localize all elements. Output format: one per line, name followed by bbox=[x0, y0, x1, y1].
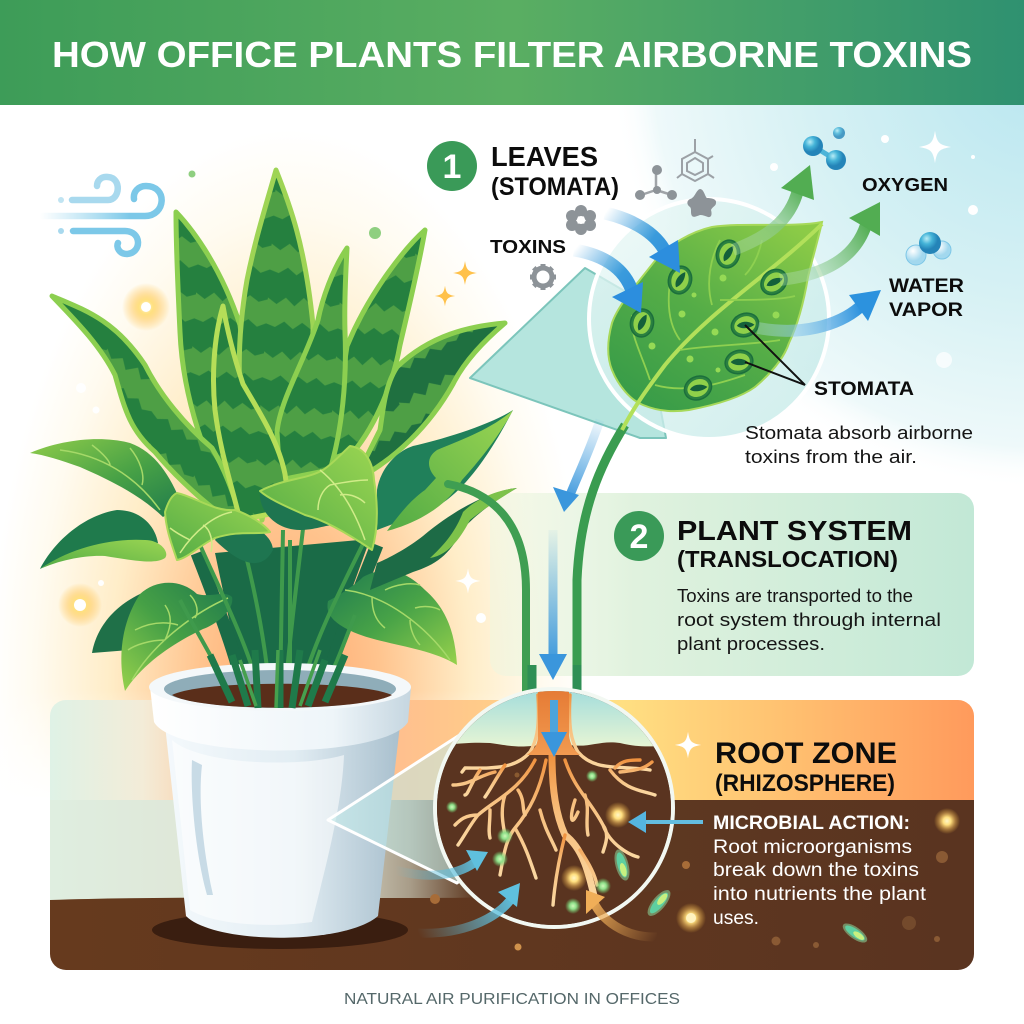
text: stomata description: Stomata absorb airborne bbox=[745, 423, 973, 443]
text: translocation description: plant processes. bbox=[677, 634, 825, 654]
text: microbial action: uses. bbox=[713, 908, 759, 929]
heading: root zone bbox=[715, 737, 897, 797]
snake leaf: right wide bbox=[355, 323, 505, 480]
text: microbial action: MICROBIAL ACTION: bbox=[713, 813, 910, 834]
heading: plant system bbox=[677, 515, 912, 572]
text: translocation description bbox=[677, 586, 941, 654]
number badge 1 bbox=[427, 141, 477, 191]
footer caption: NATURAL AIR PURIFICATION IN OFFICES bbox=[344, 991, 680, 1008]
water vapor molecule icon bbox=[906, 232, 951, 265]
label: toxins: TOXINS bbox=[490, 237, 566, 257]
heart leaf: bottom left bbox=[121, 583, 232, 691]
header banner bbox=[0, 0, 1024, 105]
snake leaf: center tall bbox=[239, 170, 313, 520]
text: microbial action: into nutrients the plant bbox=[713, 884, 927, 905]
icon: wind bbox=[42, 177, 162, 254]
plant decorative glows and sparkles bbox=[58, 170, 486, 627]
number badge 1: 1 bbox=[443, 148, 461, 186]
number badge 2: 2 bbox=[630, 518, 648, 556]
text: microbial action: break down the toxins bbox=[713, 860, 919, 881]
dark stem mass bbox=[215, 539, 370, 695]
glowing microbes and nutrients bbox=[446, 770, 632, 914]
leaf zoom circle bbox=[589, 199, 829, 439]
stem into zoom circle bbox=[532, 665, 577, 695]
curved runner stem bbox=[448, 484, 526, 695]
heart leaf: right lower bbox=[370, 488, 517, 590]
snake leaf: right narrow bbox=[277, 248, 347, 480]
number badge 2 bbox=[614, 511, 664, 561]
sparkle: root zone bbox=[675, 732, 701, 758]
pot rim bbox=[150, 687, 411, 750]
stems bbox=[180, 510, 365, 695]
text: translocation description: root system through internal bbox=[677, 610, 941, 630]
heading: plant system: (TRANSLOCATION) bbox=[677, 546, 898, 572]
toxin molecule icons bbox=[530, 139, 716, 290]
soil microbes and particles bbox=[430, 808, 960, 950]
panel: leaves zoom cone bbox=[470, 268, 666, 438]
text: translocation description: Toxins are transported to the bbox=[677, 586, 913, 606]
heading: leaves: LEAVES bbox=[491, 141, 598, 172]
heading: root zone: (RHIZOSPHERE) bbox=[715, 770, 895, 797]
text: stomata description bbox=[745, 423, 973, 467]
panel: plant system background bbox=[490, 493, 974, 676]
arrows: toxins into leaf bbox=[574, 213, 680, 313]
root zoom cone bbox=[328, 727, 560, 883]
label: oxygen: OXYGEN bbox=[862, 175, 948, 195]
snake leaf: back left bbox=[176, 212, 244, 520]
stomata openings bbox=[628, 238, 792, 404]
label: water vapor bbox=[889, 276, 964, 321]
stems over pot soil bbox=[210, 650, 345, 708]
arrows: oxygen and water vapor out bbox=[733, 165, 881, 331]
label: water vapor: VAPOR bbox=[889, 300, 963, 321]
snake leaf: back right bbox=[330, 230, 425, 460]
heading: root zone: ROOT ZONE bbox=[715, 737, 897, 770]
heart leaf: far left bbox=[30, 439, 182, 517]
blue arrow: down the stem bbox=[539, 530, 567, 680]
heart leaf: center right bbox=[260, 491, 335, 530]
stomata pointer lines bbox=[745, 325, 805, 385]
pot shadow bbox=[152, 911, 408, 949]
oxygen molecule icon bbox=[803, 127, 846, 170]
heading: plant system: PLANT SYSTEM bbox=[677, 515, 912, 546]
plant bbox=[30, 170, 526, 695]
heart leaf: bottom right bbox=[327, 571, 457, 665]
snake leaf: left long bbox=[52, 296, 240, 515]
label: stomata: STOMATA bbox=[814, 379, 914, 400]
heart leaf: lower left bbox=[40, 510, 158, 569]
label: water vapor: WATER bbox=[889, 276, 964, 297]
text: microbial action: Root microorganisms bbox=[713, 837, 912, 858]
panel: root zone background bbox=[50, 700, 974, 970]
pot body bbox=[165, 725, 400, 938]
blue arrow: leaf down to stem bbox=[553, 420, 600, 512]
plant pot bbox=[149, 650, 411, 949]
glowing root system bbox=[453, 695, 655, 905]
snake leaf: front center bbox=[214, 306, 290, 520]
arrows: into root zone bbox=[395, 850, 657, 937]
heart leaf: lower far left bbox=[92, 594, 170, 653]
stem from leaf to root bbox=[577, 425, 625, 695]
root zone zoom circle bbox=[434, 688, 674, 930]
sparkles and dots: sky bbox=[770, 131, 978, 368]
text: microbial action bbox=[713, 813, 927, 929]
arrow: microbial action pointer bbox=[628, 811, 703, 833]
heart leaf: right upper bbox=[377, 410, 513, 530]
heading: leaves bbox=[491, 141, 619, 201]
text: stomata description: toxins from the air. bbox=[745, 447, 917, 467]
heart leaf: center left bbox=[215, 515, 273, 563]
stem cross section bbox=[527, 690, 580, 755]
heading: leaves: (STOMATA) bbox=[491, 173, 619, 201]
blue arrow into roots bbox=[550, 700, 558, 735]
dark outer stalks bbox=[197, 545, 377, 695]
title: HOW OFFICE PLANTS FILTER AIRBORNE TOXINS bbox=[52, 34, 972, 75]
enlarged leaf illustration bbox=[608, 222, 822, 430]
